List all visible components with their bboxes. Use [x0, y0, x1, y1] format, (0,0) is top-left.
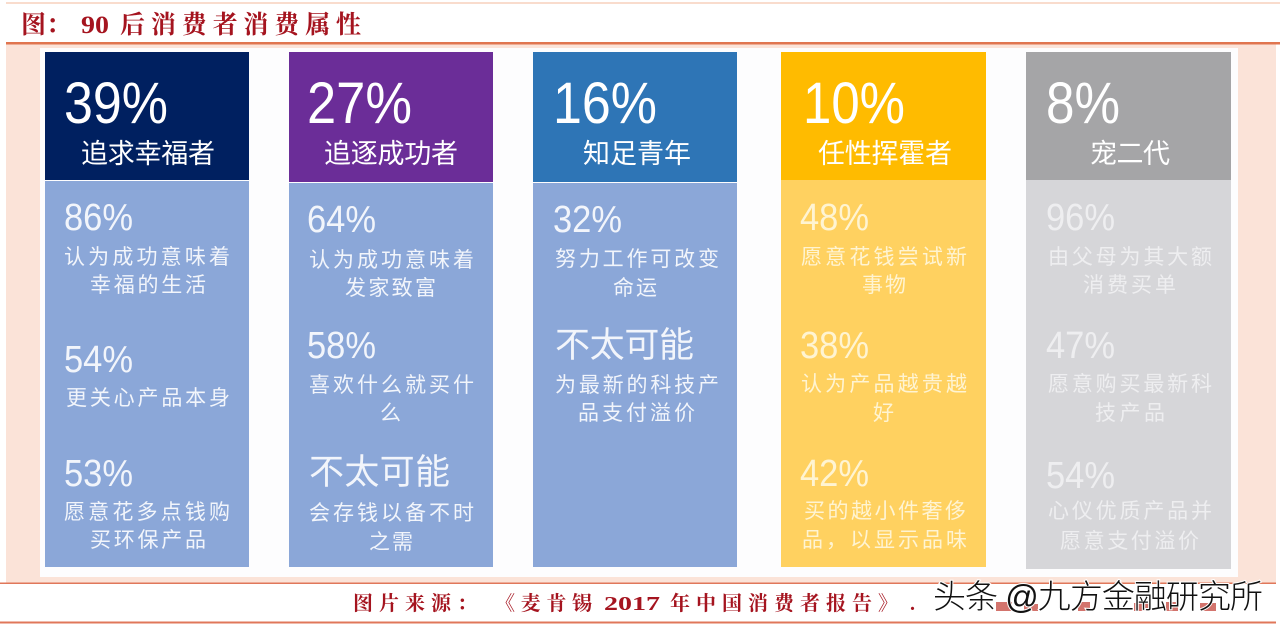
panel body: stats: 努力工作可改变: [555, 248, 719, 271]
panel body: stats: 喜欢什么就买什: [309, 374, 474, 397]
panel header: 8%: 宠二代: [1090, 139, 1170, 169]
panel body: stats: 心仪优质产品并: [1048, 500, 1212, 523]
panel body: stats: [289, 183, 493, 567]
panel body: stats: 54%: [64, 339, 133, 381]
panel body: stats: 命运: [613, 277, 657, 300]
panel: 宠二代: [1026, 52, 1231, 569]
panel header: 16%: [533, 52, 737, 182]
panel body: stats: 么: [380, 402, 401, 425]
panel body: stats: 58%: [307, 325, 376, 367]
source note: 年中国消费者报告》: [670, 591, 898, 615]
panel body: stats: 48%: [800, 197, 869, 239]
panel header: 39%: [45, 52, 249, 180]
source note: 《麦肯锡: [495, 592, 592, 615]
panel header: 16%: 知足青年: [583, 139, 691, 169]
panel body: stats: 32%: [553, 199, 622, 241]
title: [21, 10, 361, 39]
panel body: stats: 86%: [64, 197, 133, 239]
panel body: stats: 好: [873, 402, 894, 425]
panel body: stats: 为最新的科技产: [555, 374, 719, 397]
panel body: stats: 64%: [307, 199, 376, 241]
source note: 2017: [604, 593, 660, 615]
footer band: [0, 584, 1276, 622]
title: ：: [46, 12, 71, 39]
panel header: 39%: 39%: [64, 71, 168, 136]
panel header: 10%: [781, 52, 986, 180]
panel: 追求幸福者: [45, 52, 249, 567]
panel body: stats: 不太可能: [309, 453, 450, 492]
panel body: stats: 认为成功意味着: [309, 249, 474, 272]
panel body: stats: 认为产品越贵越: [801, 373, 967, 396]
panel body: stats: [533, 183, 737, 567]
panel body: stats: 幸福的生活: [90, 274, 206, 297]
source note: [353, 591, 915, 615]
panel: 追逐成功者: [289, 52, 493, 567]
panel body: stats: 品支付溢价: [578, 402, 695, 425]
panel header: 10%: 10%: [803, 71, 905, 136]
panel header: 27%: 追逐成功者: [324, 139, 458, 169]
panel body: stats: 53%: [64, 453, 133, 495]
panel body: stats: 由父母为其大额: [1048, 246, 1212, 269]
panel body: stats: 买的越小件奢侈: [804, 500, 966, 523]
panel body: stats: 愿意花多点钱购: [64, 501, 230, 524]
panel body: stats: [45, 181, 249, 567]
illegible red residue under the watermark: [996, 602, 1216, 611]
panel body: stats: 买环保产品: [90, 529, 206, 552]
panel: 知足青年: [533, 52, 737, 567]
panel body: stats: 品，以显示品味: [802, 529, 967, 552]
panel body: stats: 会存钱以备不时: [309, 502, 474, 525]
panel header: 8%: 8%: [1046, 71, 1120, 136]
panel body: stats: 消费买单: [1083, 274, 1176, 297]
panel header: 16%: 16%: [553, 71, 657, 136]
white content panel: [40, 48, 1238, 577]
panel body: stats: 愿意花钱尝试新: [801, 246, 967, 269]
panel body: stats: 42%: [800, 453, 869, 495]
panel header: 8%: [1026, 52, 1231, 180]
panel body: stats: 96%: [1046, 197, 1115, 239]
panel header: 39%: 追求幸福者: [81, 139, 215, 169]
panel body: stats: 认为成功意味着: [64, 246, 230, 269]
panel header: 27%: [289, 52, 493, 182]
panel body: stats: 技产品: [1095, 402, 1165, 425]
panel body: stats: 愿意支付溢价: [1060, 530, 1199, 553]
panel body: stats: 更关心产品本身: [66, 387, 230, 410]
panel header: 27%: 27%: [307, 71, 412, 136]
panel body: stats: 54%: [1046, 455, 1115, 497]
source note: 图片来源：: [353, 592, 477, 615]
panel header: 10%: 任性挥霍者: [818, 139, 952, 169]
panel: 任性挥霍者: [781, 52, 986, 567]
panel body: stats: [781, 180, 986, 567]
source note: .: [910, 593, 915, 615]
watermark: 头条 @九方金融研究所: [933, 578, 1263, 615]
panel body: stats: 不太可能: [555, 326, 694, 365]
panel body: stats: 愿意购买最新科: [1048, 373, 1212, 396]
panel body: stats: [1026, 180, 1231, 569]
panel body: stats: 发家致富: [345, 277, 436, 300]
title: 后消费者消费属性: [120, 10, 361, 39]
title: 图: [21, 11, 46, 39]
panel body: stats: 之需: [369, 531, 413, 554]
panel body: stats: 事物: [862, 274, 906, 297]
panel body: stats: 47%: [1046, 325, 1115, 367]
panel body: stats: 38%: [800, 325, 869, 367]
title: 90: [81, 12, 109, 39]
